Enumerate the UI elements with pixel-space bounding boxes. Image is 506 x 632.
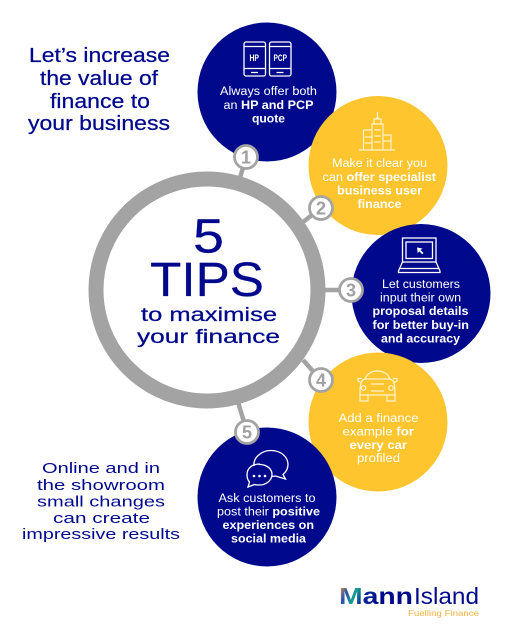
text: tip 4: profiled xyxy=(357,453,400,465)
text: tip 5: Ask customers to xyxy=(218,493,316,505)
text: tip 3: proposal details xyxy=(372,306,468,318)
text: tip 1 xyxy=(220,86,317,126)
text: online and in the showroom: can create xyxy=(53,510,150,527)
icon: HP and PCP phones: HP xyxy=(250,53,259,64)
text: online and in the showroom: small changes xyxy=(37,494,165,510)
text: online and in the showroom: impressive results xyxy=(22,526,180,543)
panel: tip 5 circle xyxy=(198,428,336,566)
panel: tip 3 circle xyxy=(352,224,490,363)
icon: car xyxy=(358,371,397,401)
text: tip 3 xyxy=(372,279,469,346)
logo: Mann Island: Fuelling Finance xyxy=(408,609,480,618)
central ring xyxy=(96,179,318,401)
heading: increase the value: Let’s increase xyxy=(29,45,170,67)
title: 5 tips xyxy=(137,210,280,348)
text: tip 2: can offer specialist xyxy=(322,172,436,184)
text: tip 2: business user xyxy=(337,186,423,198)
panel: tip 2 circle xyxy=(308,96,448,235)
title: 5 tips: TIPS xyxy=(150,254,264,307)
text: tip 5: social media xyxy=(231,534,307,546)
number badge 2 xyxy=(310,196,332,220)
icon: office buildings xyxy=(359,112,395,150)
text: tip 3: Let customers xyxy=(382,279,460,291)
text: tip 4 xyxy=(338,413,418,465)
logo: Mann Island xyxy=(339,583,480,618)
text: tip 5 xyxy=(217,493,320,546)
icon: HP and PCP phones: PCP xyxy=(274,53,287,64)
text: tip 3: and accuracy xyxy=(381,334,461,346)
number badge 3: 3 xyxy=(346,280,356,300)
text: tip 1: quote xyxy=(252,114,285,126)
number badge 5 xyxy=(236,420,258,444)
text: tip 3: for better buy-in xyxy=(372,320,469,332)
connectors from ring to numbers xyxy=(238,157,351,432)
title: 5 tips: to maximise xyxy=(141,305,277,326)
text: tip 4: every car xyxy=(350,440,408,452)
heading: increase the value: finance to xyxy=(50,91,150,113)
text: online and in the showroom: Online and in xyxy=(42,460,160,477)
text: tip 5: post their positive xyxy=(217,506,320,518)
text: tip 2 xyxy=(322,158,436,211)
panel: tip 1 circle xyxy=(198,22,336,162)
title: 5 tips: 5 xyxy=(193,210,224,264)
logo: Mann Island: Mann xyxy=(339,583,413,609)
number badge 4: 4 xyxy=(316,370,326,390)
icon: HP and PCP phones xyxy=(244,42,291,76)
text: online and in the showroom xyxy=(22,460,180,543)
number badge 1 xyxy=(234,146,258,168)
text: tip 2: Make it clear you xyxy=(332,158,427,170)
text: tip 1: Always offer both xyxy=(220,86,317,98)
text: tip 3: input their own xyxy=(380,292,461,304)
number badge 5: 5 xyxy=(242,422,252,442)
heading: increase the value: the value of xyxy=(40,68,158,90)
text: tip 5: experiences on xyxy=(222,520,314,532)
number badge 3 xyxy=(340,278,362,302)
number badge 4 xyxy=(310,368,332,392)
text: online and in the showroom: the showroom xyxy=(37,477,165,494)
icon: speech bubbles xyxy=(247,450,288,487)
text: tip 2: finance xyxy=(358,199,402,211)
text: tip 1: an HP and PCP xyxy=(224,100,314,112)
logo: Mann Island: Island xyxy=(414,583,479,609)
heading: increase the value xyxy=(28,45,170,135)
number badge 1: 1 xyxy=(241,148,251,168)
text: tip 4: example for xyxy=(342,426,415,438)
number badge 2: 2 xyxy=(316,198,326,218)
panel: tip 4 circle xyxy=(308,352,448,492)
title: 5 tips: your finance xyxy=(137,327,280,348)
icon: laptop xyxy=(398,238,440,272)
heading: increase the value: your business xyxy=(28,113,170,135)
text: tip 4: Add a finance xyxy=(338,413,418,425)
